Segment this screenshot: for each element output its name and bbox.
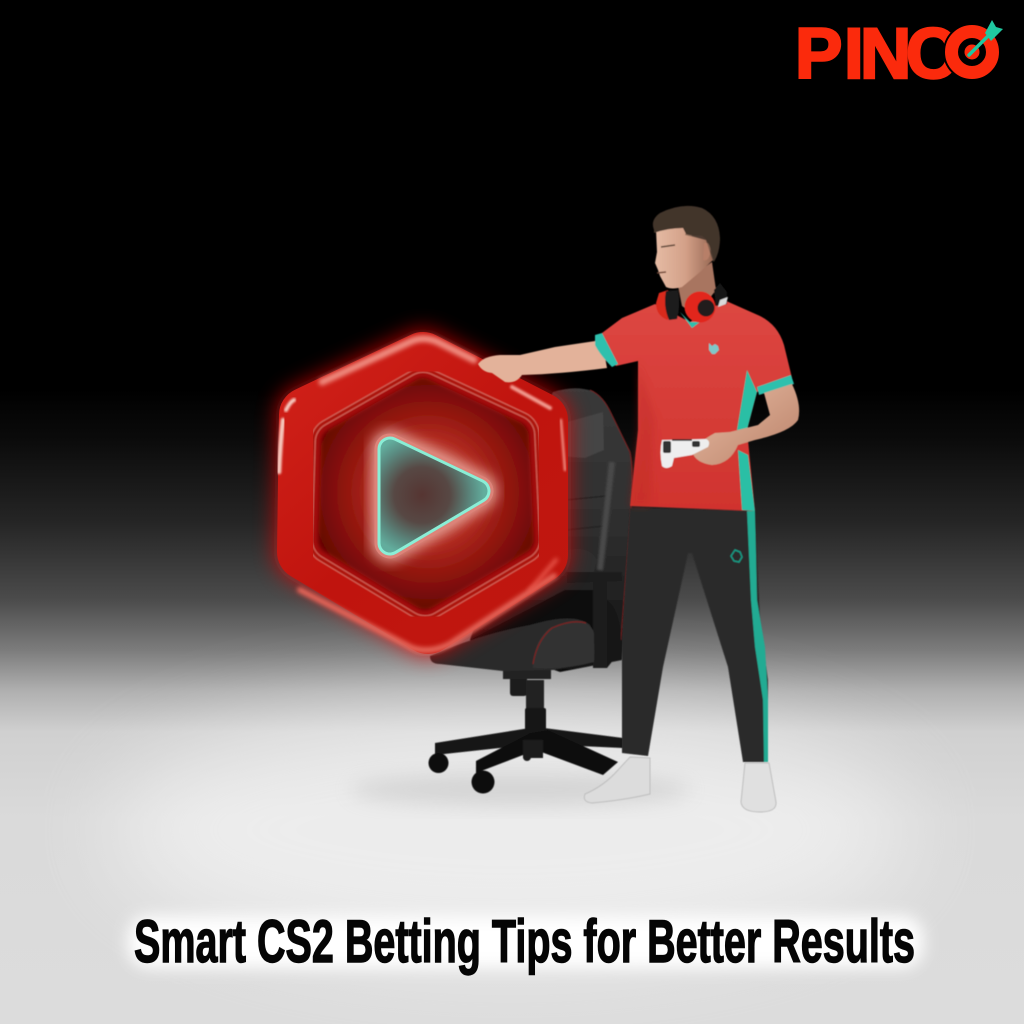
man with controller and headphones bbox=[478, 206, 799, 812]
man: left arm and hand bbox=[478, 340, 607, 382]
man: neck and head bbox=[653, 206, 720, 316]
chair seat bbox=[430, 618, 594, 671]
hexagon play badge bbox=[279, 339, 565, 650]
rim highlights bbox=[279, 339, 565, 650]
icon: target O with arrow bbox=[943, 20, 1003, 81]
icon: white controller bbox=[660, 439, 709, 468]
badge glow bbox=[305, 360, 540, 626]
logo: PINCO: PINC bbox=[795, 15, 957, 94]
badge recess bbox=[332, 392, 520, 596]
man: shoes bbox=[584, 757, 776, 812]
chair back bbox=[470, 388, 632, 672]
chair base and casters bbox=[428, 670, 623, 794]
icon: play triangle bbox=[390, 449, 478, 543]
headphones bbox=[656, 283, 728, 322]
play glow bbox=[390, 449, 478, 543]
man: right arm and hand bbox=[692, 384, 799, 465]
badge inner bevel bbox=[332, 392, 520, 596]
chair armrest bbox=[567, 572, 622, 668]
badge outer rim bbox=[305, 360, 540, 626]
man: shirt bbox=[595, 300, 794, 511]
man: trousers bbox=[622, 508, 768, 762]
gaming chair bbox=[428, 388, 632, 794]
chair headrest bbox=[556, 412, 604, 458]
